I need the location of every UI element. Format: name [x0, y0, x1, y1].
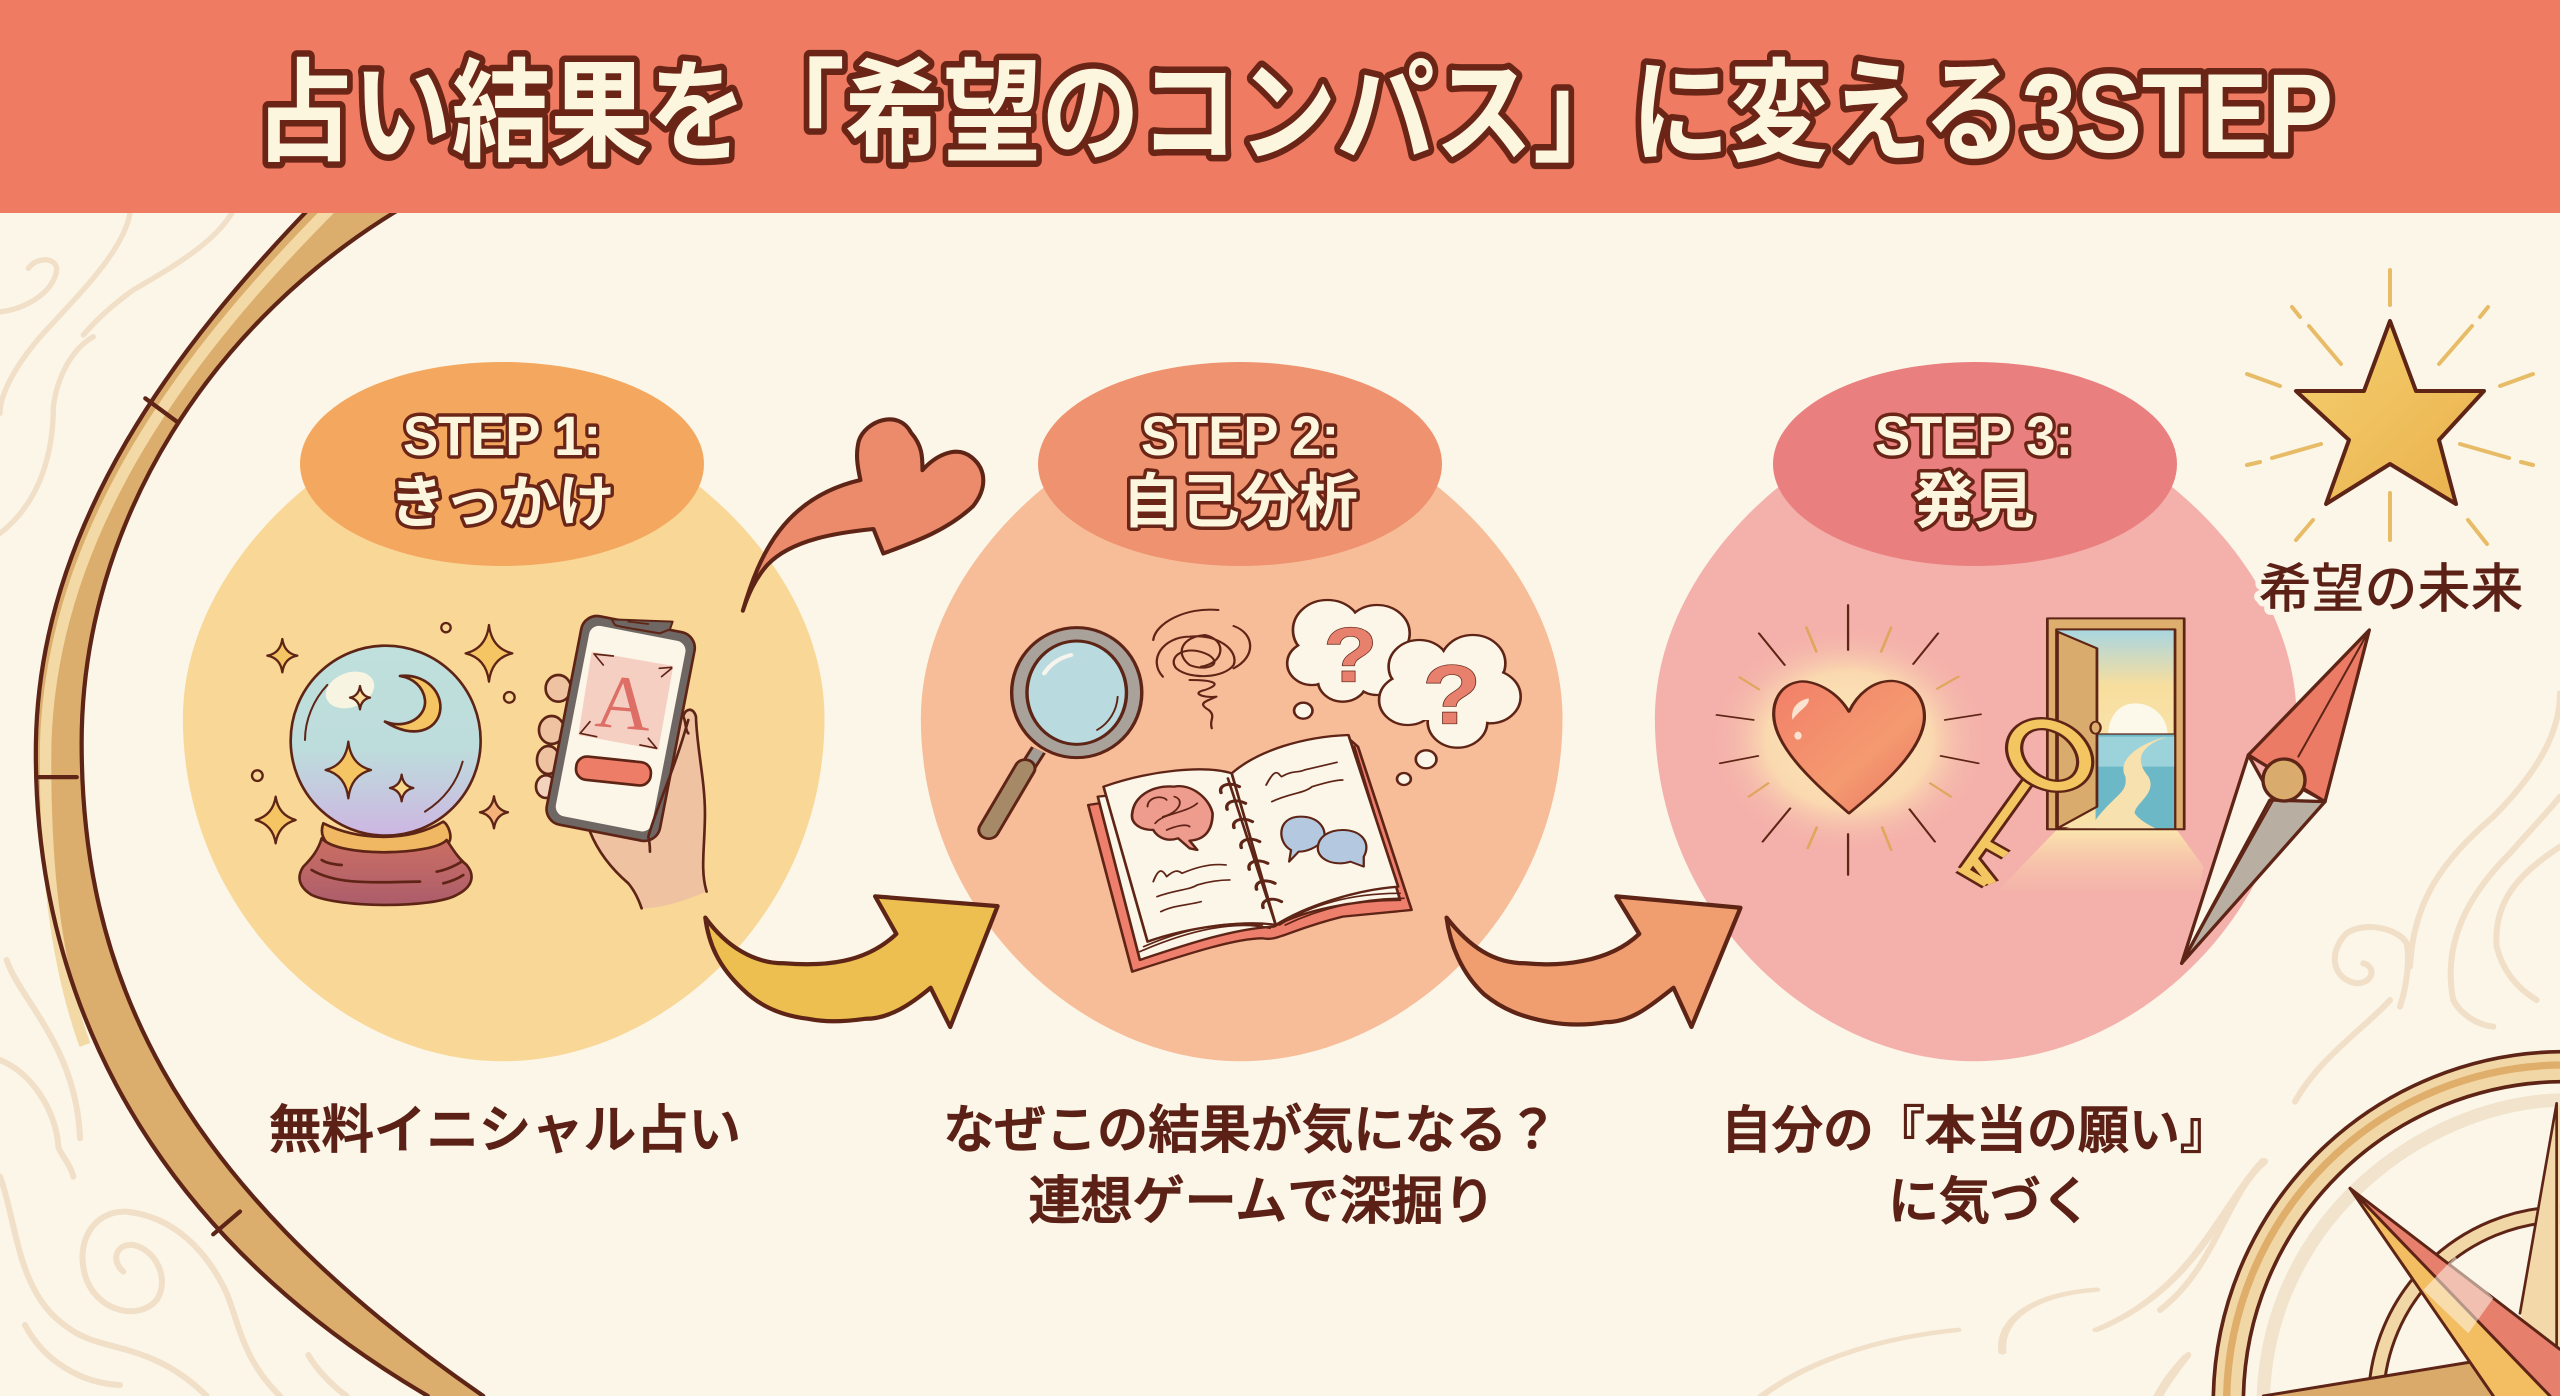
icon: tangled scribble [1153, 610, 1250, 728]
arrow: heart-shaped curved arrow [743, 419, 983, 611]
icon: compass needle [2182, 630, 2369, 963]
caption: step 1: 無料イニシャル占い [269, 1102, 741, 1160]
background swirls: bottom left [0, 960, 347, 1396]
arrow: yellow arrow step 1 to 2 [705, 896, 998, 1027]
background swirls: bottom right [1762, 693, 2560, 1396]
icon: open door with sea view [1997, 618, 2203, 892]
handwriting scribbles [1153, 762, 1343, 912]
step 1 label badge: STEP 1: [403, 404, 601, 467]
title: 占い結果を「希望のコンパス」に変える3STEP [255, 51, 2333, 176]
label: hopeful future: 希望の未来 [2258, 560, 2524, 619]
icon: crystal ball with sparkles [252, 623, 515, 905]
panel: step 3 [1655, 362, 2297, 1061]
north point [2520, 1103, 2560, 1396]
header banner [0, 0, 2560, 213]
step 3 background blob [1655, 408, 2297, 1061]
caption: step 2: 連想ゲームで深掘り [1028, 1173, 1496, 1231]
icon: open notebook with brain and speech bubbles [1088, 735, 1412, 972]
step 2 background blob [921, 408, 1563, 1061]
icon: thought clouds with question marks: ? [1323, 613, 1377, 698]
corner compass bottom right [2213, 1052, 2560, 1396]
icon: hand holding smartphone: A [593, 658, 655, 748]
caption: step 2: なぜこの結果が気になる？ [943, 1102, 1558, 1160]
icon: golden star with rays [2247, 270, 2533, 544]
needle [2350, 1188, 2560, 1396]
icon: thought clouds with question marks: ? [1423, 649, 1481, 742]
caption: step 3: に気づく [1888, 1173, 2092, 1230]
icon: thought clouds with question marks [1287, 600, 1521, 785]
arrow: coral arrow step 2 to 3 [1447, 896, 1740, 1027]
icon: glowing heart [1711, 605, 1987, 875]
step 2 label badge [1038, 362, 1442, 566]
panel: step 1 [183, 362, 825, 1061]
icon: hand holding smartphone [536, 613, 707, 908]
brain drawing [1132, 786, 1213, 850]
step 2 label badge: 自己分析 [1122, 469, 1358, 535]
icon: golden key [1960, 715, 2099, 884]
background swirls: top left [0, 213, 232, 533]
step 1 label badge: きっかけ [389, 471, 615, 535]
step 3 label badge [1773, 362, 2177, 566]
speech bubbles [1281, 817, 1366, 867]
step 3 label badge: STEP 3: [1875, 404, 2073, 467]
step 1 label badge [300, 362, 704, 566]
caption: step 3: 自分の『本当の願い』 [1721, 1102, 2231, 1159]
step 2 label badge: STEP 2: [1141, 404, 1339, 467]
large compass ring on the left [36, 204, 483, 1396]
panel: step 2 [921, 362, 1563, 1061]
step 3 label badge: 発見 [1913, 467, 2035, 535]
icon: magnifying glass [989, 628, 1142, 830]
glass highlight [2423, 1257, 2493, 1333]
step 1 background blob [183, 408, 825, 1061]
west point [2263, 1362, 2560, 1396]
